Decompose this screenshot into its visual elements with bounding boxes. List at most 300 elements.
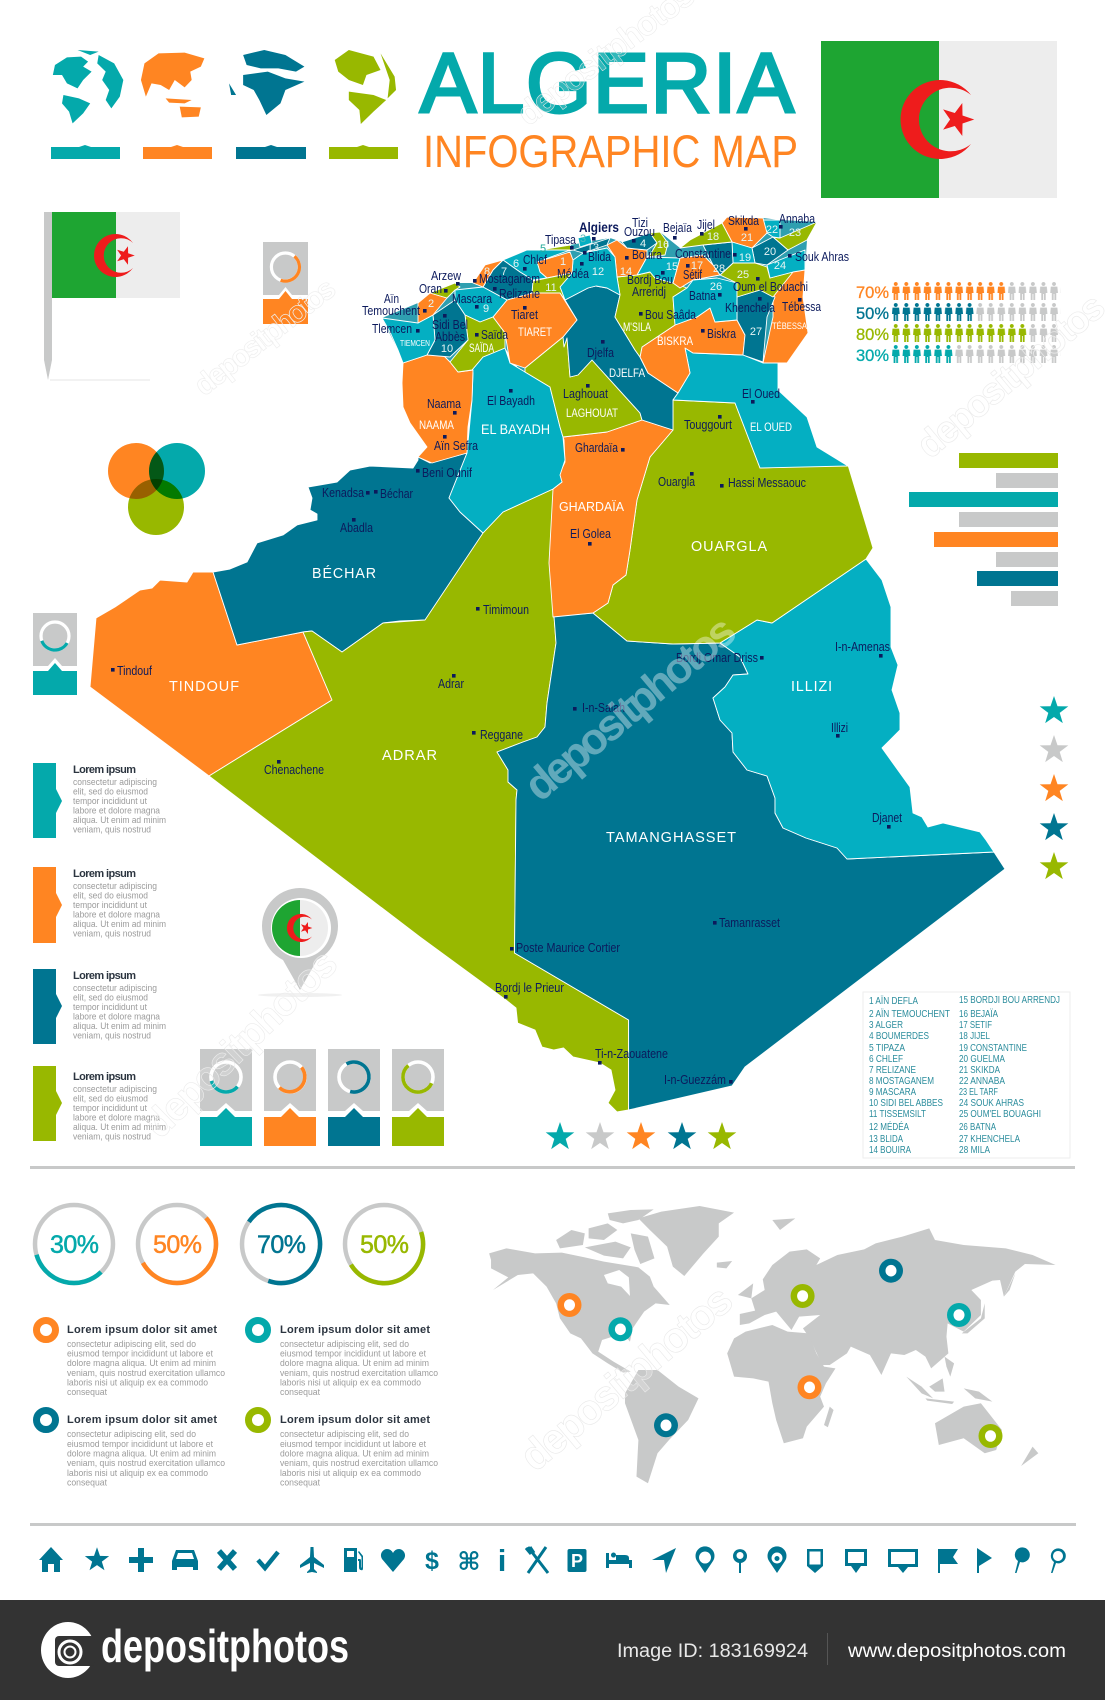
city labels: Aïn bbox=[384, 291, 399, 306]
footer logo mark bbox=[41, 1622, 95, 1678]
icon: plus bbox=[129, 1548, 153, 1572]
uppercase region names: EL OUED bbox=[750, 422, 792, 434]
block: dark teal: labore et dolore magna bbox=[73, 1012, 161, 1022]
small card: teal ring bbox=[33, 613, 77, 695]
bullet block: orange: dolore magna aliqua. Ut enim ad minim bbox=[67, 1358, 216, 1369]
block: dark teal: consectetur adipiscing bbox=[73, 983, 157, 994]
region: Aïn Témouchent 2 bbox=[418, 293, 447, 323]
region: Bordj Bou Arreridj 15 bbox=[637, 257, 680, 283]
city labels: Tiaret bbox=[511, 307, 538, 322]
region: Saïda bbox=[450, 315, 505, 372]
ring 70% bbox=[242, 1205, 320, 1283]
city labels: Kenadsa bbox=[322, 485, 365, 500]
bullet block: orange: veniam, quis nostrud exercitation ullamco bbox=[67, 1368, 225, 1379]
card: dark teal bbox=[328, 1049, 380, 1146]
block: orange: aliqua. Ut enim ad minim bbox=[73, 919, 166, 930]
uppercase region names: DJELFA bbox=[609, 368, 645, 380]
block: green: aliqua. Ut enim ad minim bbox=[73, 1122, 166, 1133]
bullet block: teal: eiusmod tempor incididunt ut labore et bbox=[280, 1348, 426, 1360]
icon: parking bbox=[568, 1549, 586, 1572]
footer bar bbox=[0, 1600, 1105, 1700]
block: green: tempor incididunt ut bbox=[73, 1103, 147, 1114]
legend right column: 23 EL TARF bbox=[959, 1087, 998, 1098]
icon: home bbox=[39, 1547, 63, 1572]
legend left column: 1 AÏN DEFLA bbox=[869, 995, 918, 1007]
province numbers: 22 bbox=[766, 224, 778, 236]
province numbers: 17 bbox=[691, 260, 703, 272]
bullet block: teal: consectetur adipiscing elit, sed do bbox=[280, 1339, 409, 1350]
city labels: Sidi Bel bbox=[432, 317, 468, 332]
city labels: Tizi bbox=[632, 215, 648, 230]
city labels: Timimoun bbox=[483, 602, 529, 617]
globe base bars bbox=[51, 145, 398, 159]
city labels: Batna bbox=[689, 288, 717, 303]
city labels: Reggane bbox=[480, 727, 523, 742]
city labels: Bejaïa bbox=[663, 220, 693, 235]
city labels: Arzew bbox=[431, 268, 462, 283]
region: El Bayadh bbox=[449, 348, 565, 533]
region: Sétif 17 bbox=[673, 255, 720, 288]
bullet block: orange: laboris nisi ut aliquip ex ea commodo bbox=[67, 1378, 208, 1388]
province numbers bbox=[428, 224, 801, 355]
city labels: Aïn Sefra bbox=[434, 438, 479, 453]
people percentage chart bbox=[856, 282, 1061, 365]
city labels: Bordj Omar Driss bbox=[676, 650, 758, 665]
map pin with flag bbox=[258, 888, 342, 997]
block: dark teal: tempor incididunt ut bbox=[73, 1002, 147, 1013]
uppercase region names: TINDOUF bbox=[169, 678, 240, 695]
legend right column: 22 ANNABA bbox=[959, 1076, 1005, 1087]
location pin: orange bbox=[558, 1293, 582, 1317]
icon: car bbox=[172, 1550, 198, 1570]
block: orange: elit, sed do eiusmod bbox=[73, 890, 148, 902]
province numbers: 13 bbox=[587, 242, 599, 254]
province numbers: 15 bbox=[666, 261, 678, 273]
province numbers: 16 bbox=[657, 239, 669, 251]
block: teal: veniam, quis nostrud bbox=[73, 824, 151, 836]
city labels: Oran bbox=[419, 281, 442, 296]
city labels: Blida bbox=[588, 249, 612, 264]
legend left column: 2 AÏN TEMOUCHENT bbox=[869, 1008, 950, 1020]
icon: fuel bbox=[344, 1548, 363, 1572]
subtitle: Infographic map: INFOGRAPHIC MAP bbox=[423, 126, 798, 177]
city labels: Illizi bbox=[831, 720, 848, 735]
legend left column: 13 BLIDA bbox=[869, 1134, 903, 1145]
uppercase region names: OUARGLA bbox=[691, 538, 768, 555]
region: Batna 26 bbox=[673, 278, 737, 325]
block: green: consectetur adipiscing bbox=[73, 1084, 157, 1095]
city labels: Arreridj bbox=[632, 284, 666, 299]
ring 50% orange: 50% bbox=[153, 1231, 202, 1259]
bullet block: green: Lorem ipsum dolor sit amet bbox=[280, 1414, 430, 1426]
city labels: Bordj Bou bbox=[627, 272, 673, 287]
region: Chlef 6 bbox=[503, 250, 570, 280]
province numbers: 21 bbox=[741, 232, 753, 244]
legend left column: 10 SIDI BEL ABBES bbox=[869, 1098, 943, 1109]
province numbers: 26 bbox=[710, 281, 722, 293]
region: Tlemcen bbox=[382, 315, 435, 363]
globe: green bbox=[335, 50, 396, 124]
region: Boumerdès 4 bbox=[622, 233, 657, 250]
bullet block: green bbox=[248, 1410, 438, 1488]
bullet block: dark teal: eiusmod tempor incididunt ut labore et bbox=[67, 1439, 213, 1450]
region: Relizane 7 bbox=[483, 260, 533, 300]
icon: dot pin bbox=[768, 1546, 786, 1573]
icon: pennant bbox=[977, 1548, 992, 1573]
legend right column: 25 OUM'EL BOUAGHI bbox=[959, 1109, 1041, 1120]
region: Naama bbox=[402, 355, 473, 463]
legend right column: 18 JIJEL bbox=[959, 1031, 990, 1042]
watermark: world map: depositphotos bbox=[511, 1275, 741, 1480]
city labels: Ouargla bbox=[658, 474, 696, 489]
block: orange: consectetur adipiscing bbox=[73, 881, 157, 892]
watermark: center: depositphotos bbox=[515, 606, 746, 811]
row 30% bbox=[856, 345, 1061, 365]
bullet block: green: consectetur adipiscing elit, sed do bbox=[280, 1429, 409, 1440]
province numbers: 2 bbox=[428, 298, 434, 310]
uppercase region names: BÉCHAR bbox=[312, 565, 377, 582]
city labels: I-n-Amenas bbox=[835, 639, 890, 654]
bullet block: dark teal: consequat bbox=[67, 1478, 107, 1488]
icon: command: ⌘ bbox=[457, 1547, 481, 1576]
region: Annaba 22 bbox=[763, 220, 780, 238]
uppercase region names: NAAMA bbox=[419, 420, 454, 432]
uppercase region names: ADRAR bbox=[382, 747, 438, 764]
region: Mostaganem 8 bbox=[473, 260, 503, 287]
region: Jijel 18 bbox=[680, 223, 732, 248]
legend right column: 19 CONSTANTINE bbox=[959, 1043, 1027, 1054]
block: teal: tempor incididunt ut bbox=[73, 796, 147, 807]
crescent bbox=[901, 80, 971, 159]
block: teal bbox=[33, 763, 166, 838]
continents bbox=[489, 1206, 1056, 1483]
legend right column: 26 BATNA bbox=[959, 1122, 996, 1133]
bottom star row bbox=[546, 1122, 736, 1149]
block: dark teal: veniam, quis nostrud bbox=[73, 1030, 151, 1042]
city dots bbox=[111, 225, 891, 1084]
bullet block: dark teal: consectetur adipiscing elit, sed do bbox=[67, 1429, 196, 1440]
city labels: Algiers bbox=[579, 220, 619, 235]
northern backing bbox=[382, 217, 817, 437]
province numbers: 20 bbox=[764, 246, 776, 258]
bullet block: orange bbox=[36, 1320, 225, 1398]
legend right column: 20 GUELMA bbox=[959, 1054, 1005, 1065]
ring 50% green: 50% bbox=[360, 1231, 409, 1259]
province legend box bbox=[863, 992, 1070, 1158]
city labels: El Oued bbox=[742, 386, 780, 401]
region: M'Sila bbox=[615, 272, 687, 357]
bullet block: teal: veniam, quis nostrud exercitation ullamco bbox=[280, 1368, 438, 1379]
city labels: I-n-Guezzám bbox=[664, 1072, 726, 1087]
bullet block: green: eiusmod tempor incididunt ut labore et bbox=[280, 1439, 426, 1450]
icon row bbox=[39, 1543, 1066, 1578]
bullet block: dark teal: Lorem ipsum dolor sit amet bbox=[67, 1414, 217, 1426]
block: orange bbox=[33, 867, 166, 943]
block: dark teal: aliqua. Ut enim ad minim bbox=[73, 1021, 166, 1032]
region: Aïn Defla 1 bbox=[537, 252, 573, 278]
row 80% bbox=[856, 324, 1061, 344]
city labels: Ouzou bbox=[624, 224, 655, 239]
region: Alger 3 bbox=[578, 235, 592, 247]
city labels: Annaba bbox=[779, 211, 816, 226]
legend left column: 5 TIPAZA bbox=[869, 1043, 905, 1054]
uppercase region names: M'SILA bbox=[623, 322, 651, 334]
province numbers: 19 bbox=[739, 252, 751, 264]
location pin: dark teal bbox=[879, 1259, 903, 1283]
icon: flag bbox=[938, 1549, 958, 1573]
region: Khenchela 27 bbox=[737, 290, 775, 362]
left text blocks bbox=[33, 763, 166, 1142]
region: Souk Ahras 24 bbox=[767, 250, 805, 278]
base bar: teal bbox=[51, 145, 120, 159]
legend left column: 4 BOUMERDES bbox=[869, 1031, 929, 1042]
globe: dark teal bbox=[229, 50, 304, 115]
city labels: Laghouat bbox=[563, 386, 608, 401]
legend left column: 6 CHLEF bbox=[869, 1054, 903, 1065]
city labels: El Bayadh bbox=[487, 393, 535, 408]
uppercase region names: GHARDAÏA bbox=[559, 499, 624, 514]
icon: wide callout bbox=[888, 1549, 918, 1573]
row 70% bbox=[856, 282, 1061, 302]
city labels: Relizane bbox=[499, 286, 540, 301]
province numbers: 5 bbox=[540, 243, 546, 255]
region: Tiaret bbox=[493, 293, 577, 368]
uppercase region names: TIARET bbox=[518, 327, 552, 339]
legend left column: 8 MOSTAGANEM bbox=[869, 1076, 934, 1087]
location pin: dark teal South America bbox=[654, 1413, 678, 1437]
legend right column: 15 BORDJI BOU ARRENDJ bbox=[959, 995, 1060, 1006]
legend right column: 17 SETIF bbox=[959, 1020, 992, 1031]
region: Tissemsilt 11 bbox=[532, 273, 572, 300]
title bbox=[420, 36, 798, 177]
uppercase region names: TÉBESSA bbox=[772, 321, 808, 332]
block: green bbox=[33, 1066, 166, 1142]
city labels: Tébessa bbox=[782, 299, 822, 314]
city labels: Béchar bbox=[380, 486, 414, 501]
pole shadow bbox=[50, 379, 150, 381]
region: Laghouat bbox=[525, 337, 642, 437]
block: teal: labore et dolore magna bbox=[73, 806, 161, 816]
card: teal bbox=[200, 1049, 252, 1146]
province numbers: 6 bbox=[513, 258, 519, 270]
legend right column: 24 SOUK AHRAS bbox=[959, 1098, 1024, 1109]
city labels bbox=[117, 211, 902, 1087]
block: orange: labore et dolore magna bbox=[73, 910, 161, 920]
bullet block: orange: consequat bbox=[67, 1387, 107, 1398]
city labels: Saïda bbox=[481, 327, 509, 342]
city labels: Abadla bbox=[340, 520, 374, 535]
uppercase region names: BISKRA bbox=[657, 336, 693, 348]
card: orange bbox=[264, 1049, 316, 1146]
bullet block: dark teal: veniam, quis nostrud exercitation ullamco bbox=[67, 1458, 225, 1469]
globes row bbox=[53, 50, 396, 124]
icon: bed bbox=[606, 1553, 632, 1568]
block: orange: tempor incididunt ut bbox=[73, 900, 147, 911]
location pin: teal east bbox=[947, 1303, 971, 1327]
location pin: orange Africa bbox=[798, 1375, 822, 1399]
city labels: Bordj le Prieur bbox=[495, 980, 565, 995]
bullet block: orange: consectetur adipiscing elit, sed do bbox=[67, 1339, 196, 1350]
Algeria map bbox=[90, 217, 1005, 1112]
globe: orange bbox=[141, 53, 204, 117]
bullet text blocks bbox=[36, 1320, 438, 1488]
watermark: upper left: depositphotos bbox=[188, 272, 342, 403]
city labels: Touggourt bbox=[684, 417, 732, 432]
uppercase region names: TIEMCEN bbox=[400, 338, 430, 348]
base bar: orange bbox=[143, 145, 212, 159]
city labels: Chlef bbox=[523, 252, 547, 267]
ring 50% green bbox=[345, 1205, 423, 1283]
city labels: Djelfa bbox=[587, 345, 615, 360]
block: orange: veniam, quis nostrud bbox=[73, 928, 151, 940]
bullet block: dark teal bbox=[36, 1410, 225, 1488]
world map bbox=[489, 1206, 1056, 1483]
city labels: Bou Saâda bbox=[645, 307, 697, 322]
row 50% bbox=[856, 303, 1061, 323]
right star column bbox=[1040, 696, 1068, 879]
bullet block: dark teal: laboris nisi ut aliquip ex ea commodo bbox=[67, 1468, 208, 1479]
icon: parking: P bbox=[571, 1551, 583, 1571]
province numbers: 27 bbox=[750, 326, 762, 338]
region: Tipaza 5 bbox=[540, 245, 573, 255]
icon: cross bbox=[219, 1551, 235, 1569]
uppercase region names: ILLIZI bbox=[791, 678, 833, 695]
block: teal: consectetur adipiscing bbox=[73, 777, 157, 788]
block: dark teal bbox=[33, 969, 166, 1044]
region: Béjaïa 16 bbox=[647, 232, 668, 257]
province numbers: 25 bbox=[737, 269, 749, 281]
bullet block: green: dolore magna aliqua. Ut enim ad minim bbox=[280, 1448, 429, 1460]
icon: small ring pin bbox=[733, 1549, 747, 1573]
city labels: Hassi Messaouc bbox=[728, 475, 806, 490]
city labels: Souk Ahras bbox=[795, 249, 849, 264]
city labels: Tlemcen bbox=[372, 321, 412, 336]
region: Illizi bbox=[713, 559, 994, 859]
legend left column: 7 RELIZANE bbox=[869, 1065, 916, 1076]
city labels: Médéa bbox=[557, 266, 590, 281]
city labels: Constantine bbox=[675, 246, 731, 261]
region: Tébessa bbox=[763, 270, 808, 363]
legend right column: 28 MILA bbox=[959, 1145, 990, 1156]
uppercase region names: LAGHOUAT bbox=[566, 408, 618, 420]
ring cards row bbox=[200, 1049, 444, 1146]
region: Ghardaïa bbox=[549, 420, 673, 617]
region: Oran bbox=[430, 283, 460, 298]
icon: fork and knife bbox=[526, 1547, 548, 1573]
icon: dollar: $ bbox=[425, 1547, 439, 1575]
image id: Image ID: 183169924 bbox=[617, 1641, 808, 1662]
bullet block: dark teal: dolore magna aliqua. Ut enim ad minim bbox=[67, 1448, 216, 1460]
region: Sidi Bel Abbès 10 bbox=[427, 300, 468, 357]
region: El Tarf 23 bbox=[773, 222, 817, 250]
city labels: I-n-Salah bbox=[582, 700, 625, 715]
city labels: Tindouf bbox=[117, 663, 152, 678]
bullet block: teal: dolore magna aliqua. Ut enim ad minim bbox=[280, 1358, 429, 1369]
pin shadow bbox=[258, 993, 342, 997]
city labels: Tamanrasset bbox=[719, 915, 780, 930]
region: Skikda 21 bbox=[722, 217, 767, 248]
bullet block: teal: Lorem ipsum dolor sit amet bbox=[280, 1324, 430, 1336]
website: www.depositphotos.com bbox=[847, 1641, 1066, 1662]
icon: square callout bbox=[845, 1549, 867, 1573]
row 50%: 50% bbox=[856, 305, 889, 323]
province numbers: 23 bbox=[789, 227, 801, 239]
city labels: Abbès bbox=[435, 329, 465, 344]
icon: navigation arrow bbox=[652, 1548, 676, 1573]
ring 30% bbox=[35, 1205, 113, 1283]
uppercase region names: TAMANGHASSET bbox=[606, 829, 737, 846]
uppercase region names: EL BAYADH bbox=[481, 422, 550, 437]
city labels: Ghardaïa bbox=[575, 440, 619, 455]
icon: star bbox=[85, 1547, 109, 1570]
title line: Algeria: ALGERIA bbox=[420, 36, 794, 130]
city labels: Naama bbox=[427, 396, 462, 411]
big Algerian flag bbox=[821, 41, 1057, 198]
province numbers: 1 bbox=[560, 256, 566, 268]
percentage rings bbox=[35, 1205, 423, 1283]
legend right column: 21 SKIKDA bbox=[959, 1065, 1000, 1076]
province numbers: 18 bbox=[707, 231, 719, 243]
bullet block: green: laboris nisi ut aliquip ex ea commodo bbox=[280, 1468, 421, 1479]
small card: orange ring bbox=[263, 242, 308, 324]
city labels: Tipasa bbox=[545, 232, 577, 247]
watermark: lower left: depositphotos bbox=[136, 941, 346, 1146]
city labels: Djanet bbox=[872, 810, 902, 825]
region: Bouira 14 bbox=[607, 240, 647, 277]
city labels: Biskra bbox=[707, 326, 737, 341]
ring 50% orange bbox=[138, 1205, 216, 1283]
region: Oum el Bouaghi 25 bbox=[720, 263, 793, 297]
region: Constantine 19 bbox=[732, 242, 755, 263]
row 80%: 80% bbox=[856, 326, 889, 344]
footer logo text: depositphotos bbox=[101, 1620, 349, 1672]
city labels: Mascara bbox=[452, 291, 493, 306]
region: Blida 13 bbox=[573, 238, 610, 253]
region: Biskra bbox=[640, 308, 745, 393]
legend left column bbox=[869, 995, 950, 1156]
legend left column: 11 TISSEMSILT bbox=[869, 1109, 926, 1120]
location pin: green Australia bbox=[978, 1424, 1002, 1448]
star bbox=[943, 103, 974, 136]
legend left column: 9 MASCARA bbox=[869, 1087, 916, 1098]
bullet block: teal: consequat bbox=[280, 1387, 320, 1398]
uppercase region names bbox=[169, 321, 833, 846]
province numbers: 9 bbox=[483, 303, 489, 315]
region: Djelfa bbox=[563, 286, 678, 430]
icon: info: i bbox=[498, 1543, 506, 1578]
block: orange: Lorem ipsum bbox=[73, 868, 136, 880]
row 70%: 70% bbox=[856, 284, 889, 302]
horizontal bar chart bbox=[909, 453, 1058, 606]
province numbers: 24 bbox=[774, 260, 786, 272]
block: green: Lorem ipsum bbox=[73, 1071, 136, 1083]
city labels: Khenchela bbox=[725, 300, 776, 315]
ring 30%: 30% bbox=[50, 1231, 99, 1259]
block: teal: elit, sed do eiusmod bbox=[73, 786, 148, 798]
icon: plane bbox=[300, 1547, 324, 1573]
city labels: Ti-n-Zaouatene bbox=[595, 1046, 668, 1061]
icon: ring pin bbox=[696, 1546, 714, 1573]
city labels: Oum el Bouachi bbox=[733, 279, 808, 294]
region: Tamanghasset bbox=[497, 613, 1005, 1110]
region: Tindouf bbox=[90, 572, 332, 776]
block: green: labore et dolore magna bbox=[73, 1112, 161, 1124]
watermarks bbox=[136, 0, 1105, 1480]
card: green bbox=[392, 1049, 444, 1146]
province numbers: 11 bbox=[545, 282, 557, 294]
row 30%: 30% bbox=[856, 347, 889, 365]
city labels: Adrar bbox=[438, 676, 465, 691]
